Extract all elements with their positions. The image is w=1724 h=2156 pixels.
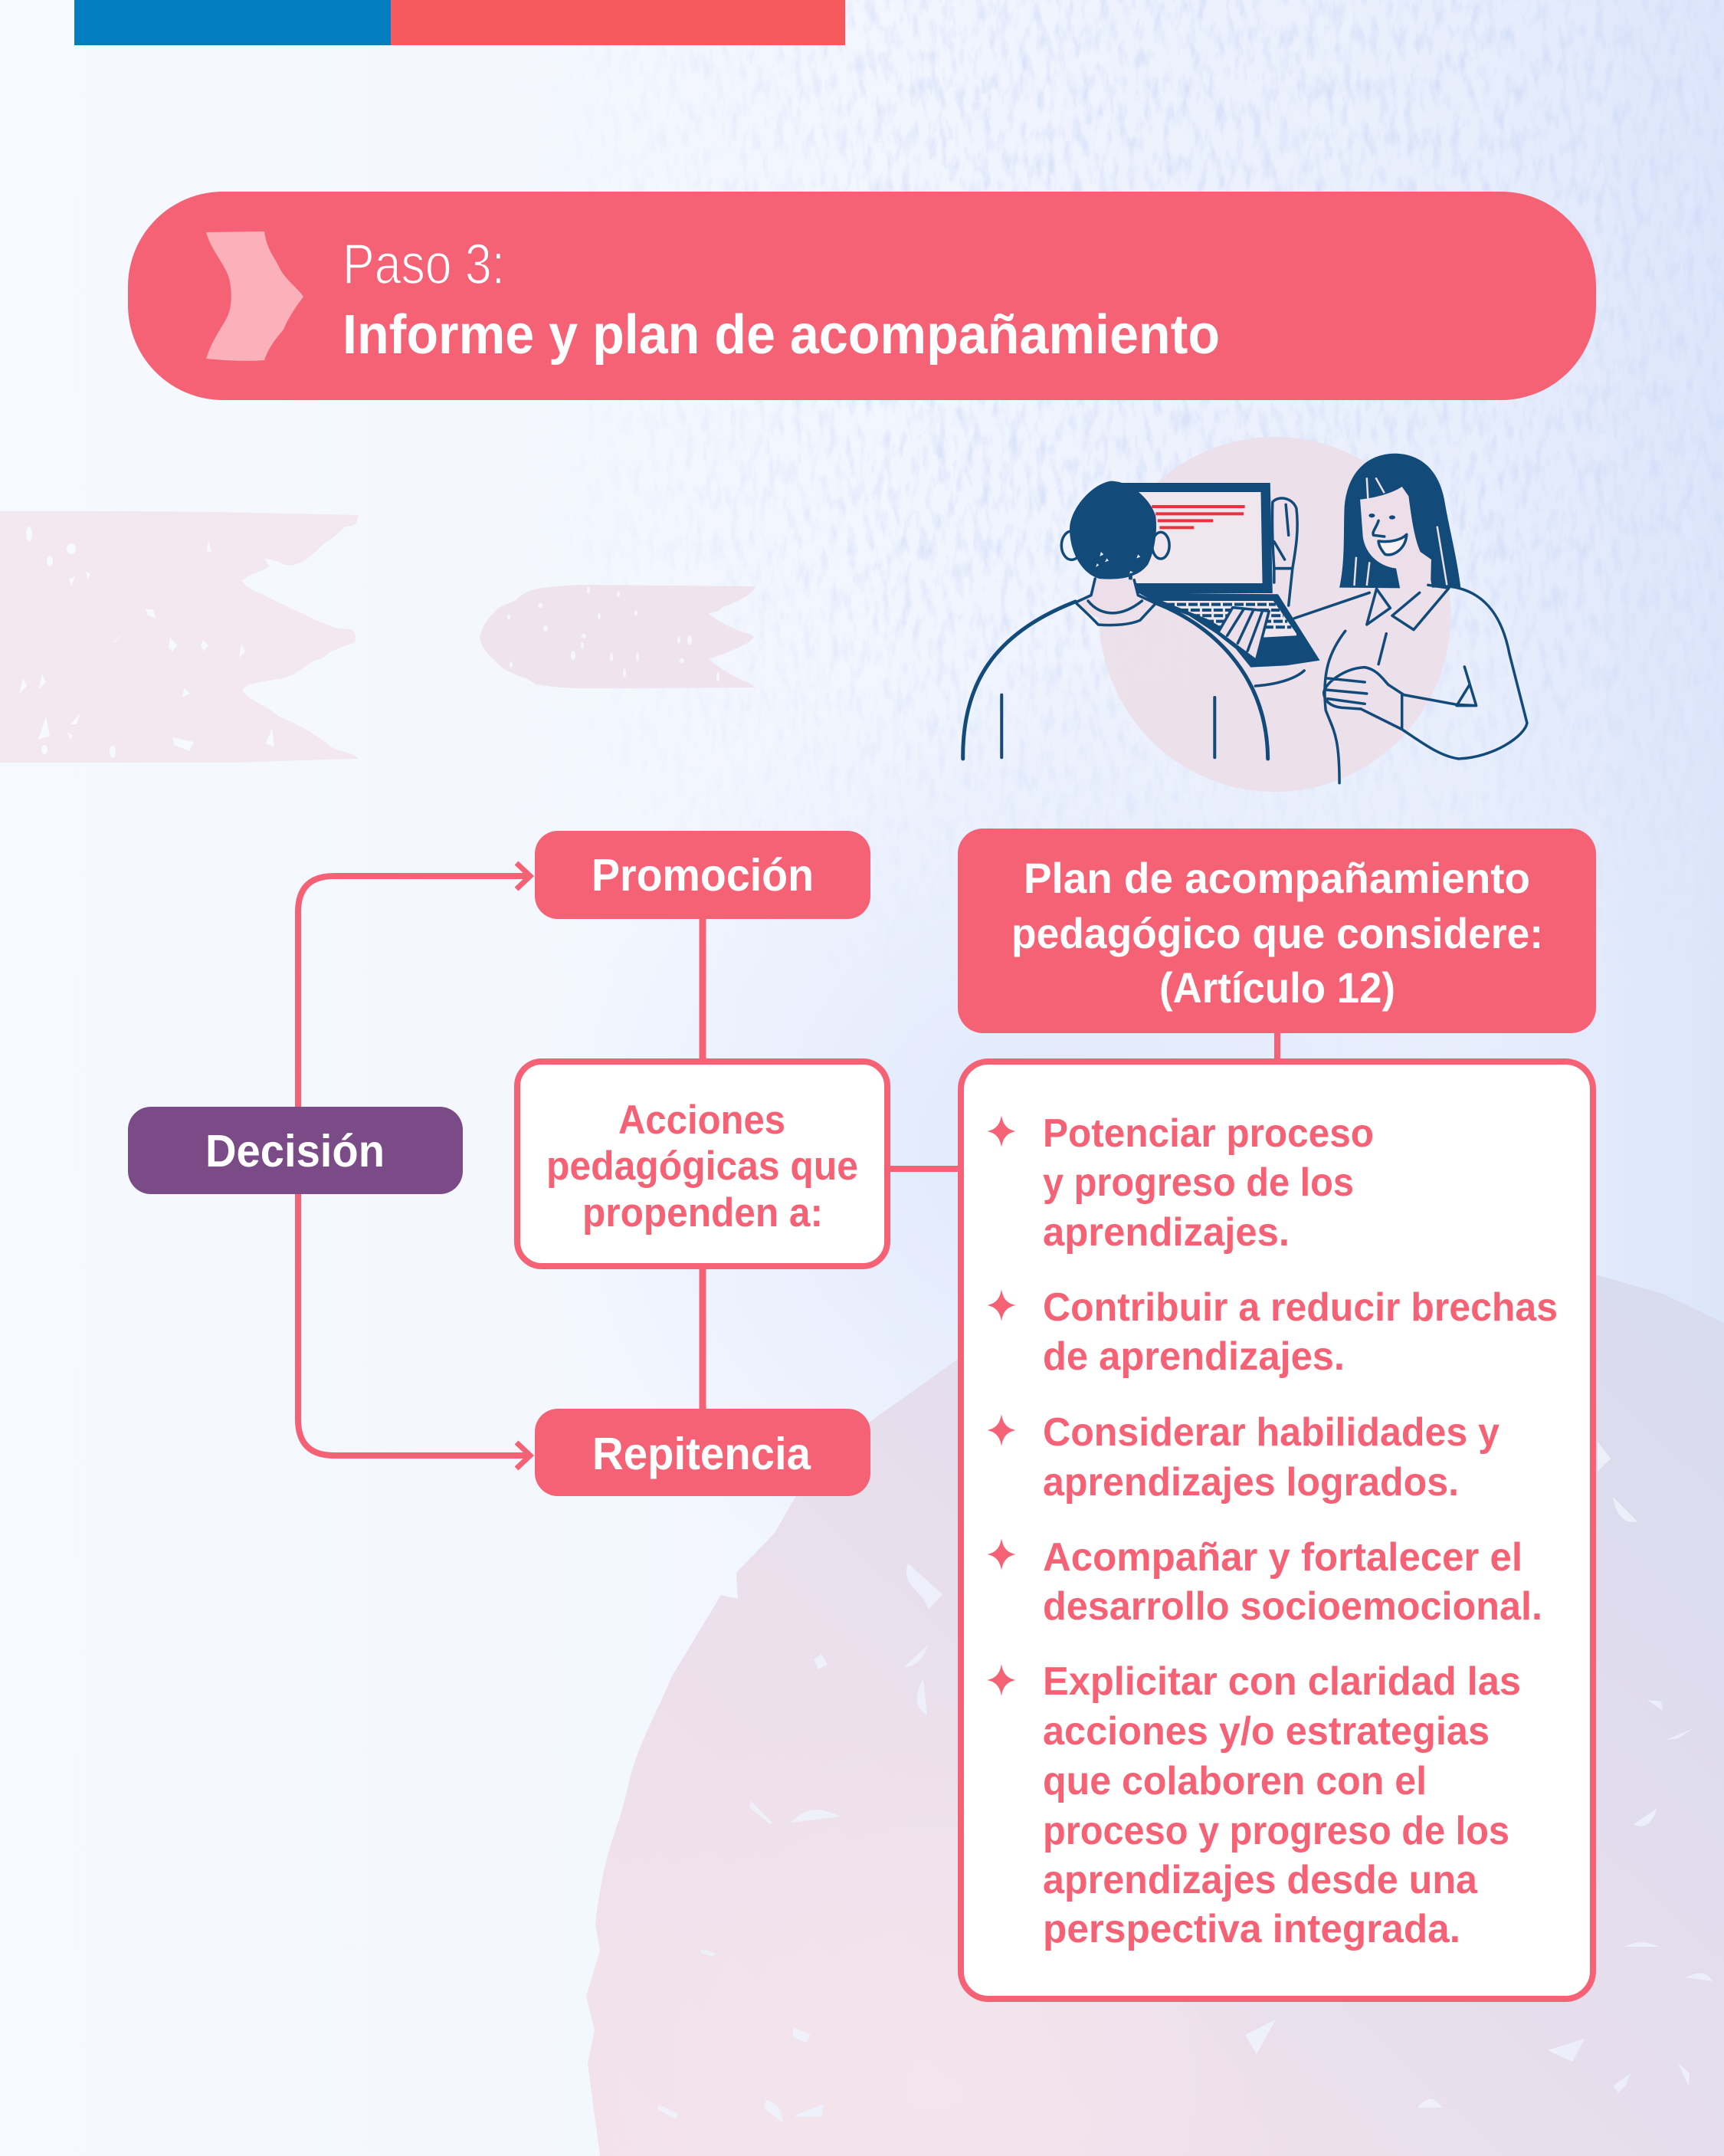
- connector: outcomes to actions: [699, 916, 706, 1412]
- icon: chevron: [206, 231, 303, 361]
- list item 2: de aprendizajes.: [1043, 1334, 1345, 1379]
- plan heading box: pedagógico que considere:: [1011, 909, 1543, 957]
- list item 1: Potenciar proceso: [1043, 1111, 1374, 1156]
- man: [963, 481, 1268, 759]
- plan list panel: [961, 1062, 1593, 1999]
- illustration: two people at a laptop: [963, 437, 1527, 792]
- connector: decision to outcomes: [298, 863, 530, 1469]
- connector: actions to plan list: [889, 1031, 1277, 1169]
- list item 4: [987, 1535, 1542, 1629]
- title: Informe y plan de acompañamiento: [343, 304, 1220, 366]
- background wash: [636, 0, 1724, 1423]
- header pill: [128, 192, 1596, 400]
- repetition box: [535, 1409, 870, 1496]
- list item 5: aprendizajes desde una: [1043, 1858, 1478, 1902]
- laptop base: [1138, 592, 1320, 668]
- plan heading box: Plan de acompañamiento: [1024, 854, 1530, 902]
- woman: [1255, 454, 1527, 783]
- list item 5: que colaboren con el: [1043, 1759, 1427, 1803]
- list item 5: proceso y progreso de los: [1043, 1809, 1509, 1853]
- top colour bar: [74, 0, 845, 45]
- ribbon shape left: [0, 511, 359, 763]
- list item 2: [987, 1285, 1558, 1379]
- list item 3: aprendizajes logrados.: [1043, 1460, 1459, 1505]
- list item 4: Acompañar y fortalecer el: [1043, 1535, 1522, 1580]
- repetition box: Repitencia: [592, 1429, 811, 1479]
- promotion box: Promoción: [592, 850, 814, 901]
- list item 2: Contribuir a reducir brechas: [1043, 1285, 1558, 1330]
- plan heading box: [958, 829, 1596, 1033]
- list item 5: Explicitar con claridad las: [1043, 1659, 1521, 1704]
- list item 1: [987, 1111, 1374, 1255]
- ribbon shape right: [480, 585, 755, 688]
- list item 5: perspectiva integrada.: [1043, 1907, 1460, 1951]
- plan heading box: (Artículo 12): [1159, 963, 1395, 1012]
- promotion box: [535, 831, 870, 919]
- confetti chips on blob: [657, 1442, 1713, 2123]
- list item 3: Considerar habilidades y: [1043, 1410, 1499, 1455]
- actions box: propenden a:: [582, 1190, 823, 1236]
- background blob: lower right watercolor: [586, 1252, 1724, 2156]
- woman's raised hand: [1272, 498, 1297, 605]
- step label: Paso 3:: [343, 232, 505, 296]
- list item 1: aprendizajes.: [1043, 1210, 1290, 1255]
- list item 4: desarrollo socioemocional.: [1043, 1584, 1542, 1629]
- decision box: Decisión: [205, 1126, 385, 1176]
- actions box: Acciones: [618, 1098, 785, 1143]
- laptop screen: [1119, 483, 1273, 593]
- list item 3: [987, 1410, 1499, 1505]
- list item 5: acciones y/o estrategias: [1043, 1709, 1490, 1754]
- decision box: [128, 1107, 463, 1194]
- circle backdrop: [1099, 437, 1450, 792]
- actions box: pedagógicas que: [546, 1144, 858, 1189]
- actions box: [517, 1062, 887, 1266]
- list item 5: [987, 1659, 1521, 1951]
- list item 1: y progreso de los: [1043, 1160, 1354, 1205]
